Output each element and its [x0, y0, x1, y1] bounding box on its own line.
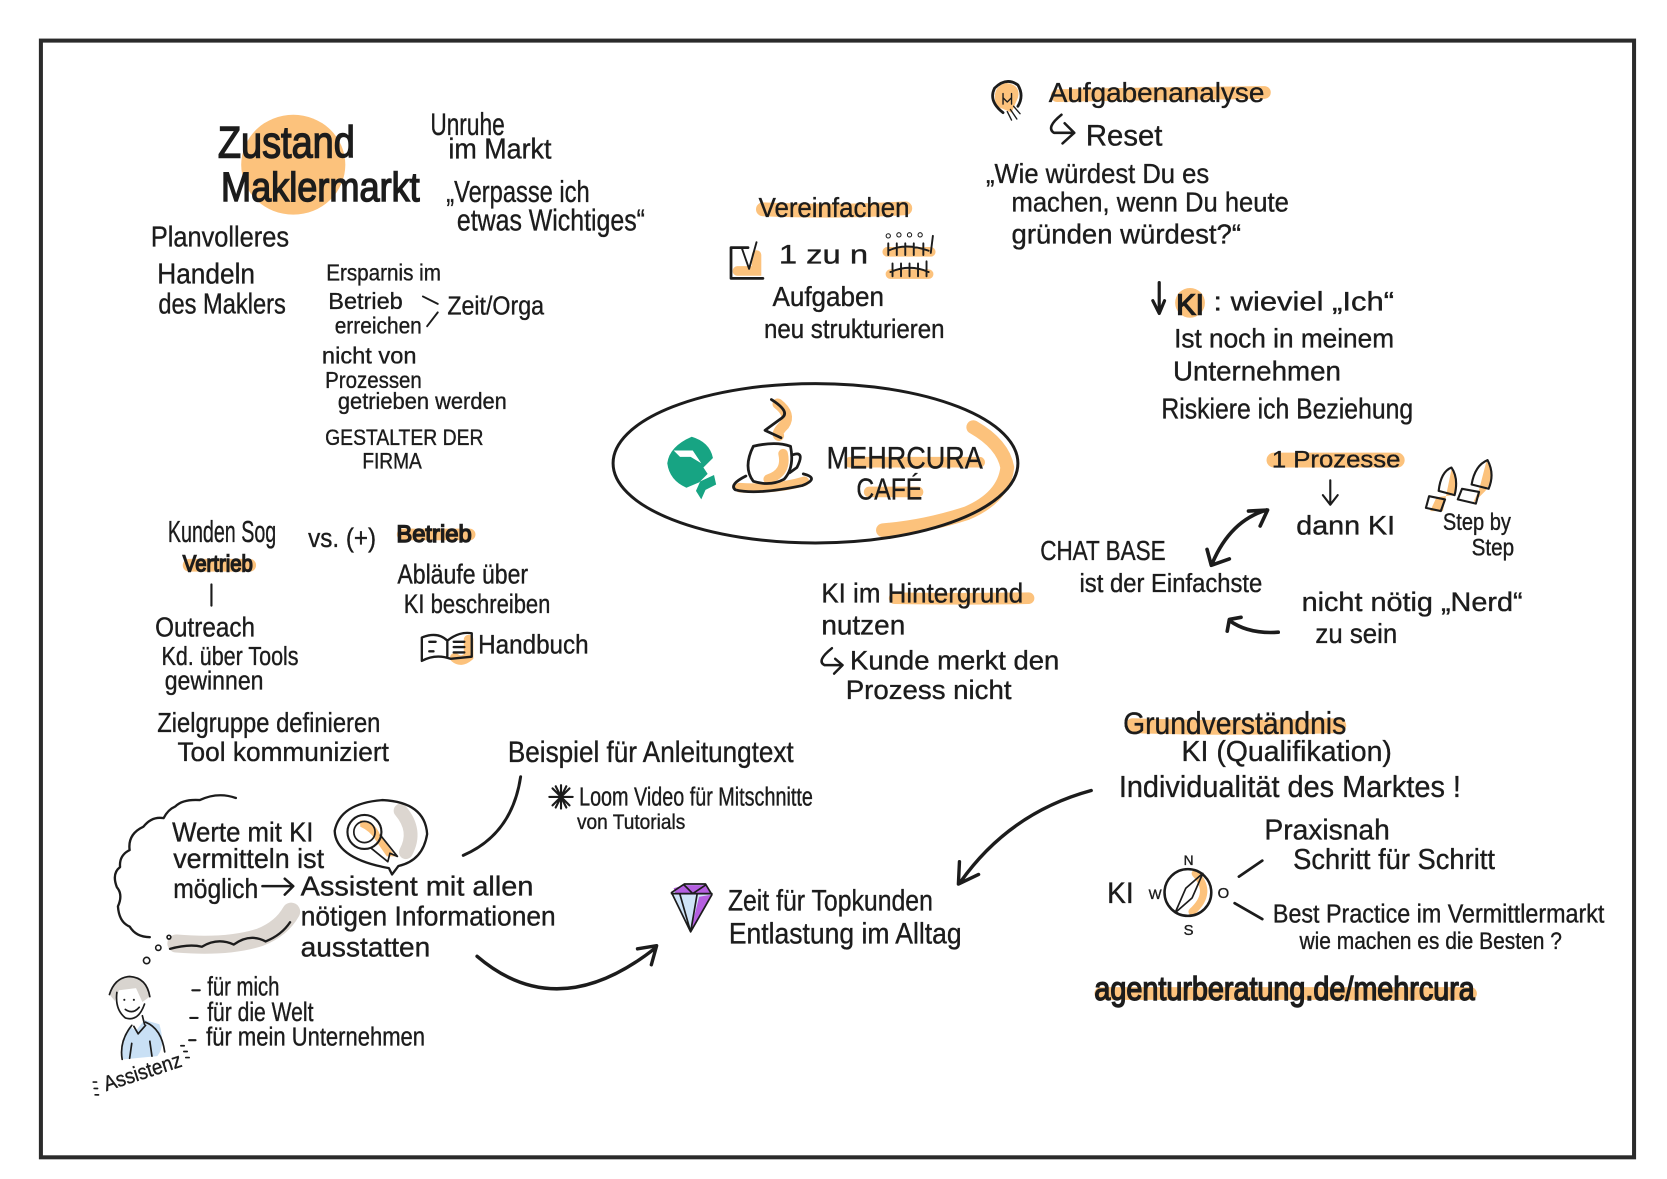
text: Best Practice: Best Practice im Vermittlermarkt [1273, 900, 1604, 928]
text: Gestalter der Firma [325, 425, 483, 474]
icon: compass [1149, 852, 1229, 939]
section: KI wieviel Ich: : wieviel „Ich“ [1213, 286, 1394, 316]
section: Aufgabenanalyse: „Wie würdest Du es [986, 158, 1209, 189]
text: Planvolleres Handeln des Maklers [151, 222, 289, 320]
section: Kunden Sog Vertrieb: Outreach [155, 611, 255, 642]
section: 1 Prozesse dann KI [1272, 447, 1400, 540]
quote: Verpasse ich etwas Wichtiges [446, 174, 645, 238]
text: Zeit für Topkunden [728, 885, 962, 951]
heading: Zustand Maklermarkt [218, 115, 420, 215]
section: Betrieb: Handbuch [478, 629, 589, 659]
text: Zeit für Topkunden: Zeit für Topkunden [728, 885, 933, 918]
section: Kunden Sog Vertrieb: Zielgruppe definieren [157, 707, 380, 738]
section: KI im Hintergrund: KI im Hintergrund [821, 577, 1023, 608]
icon: diamond [672, 884, 712, 932]
section: Betrieb: Abläufe über [397, 558, 528, 589]
icon: star [549, 785, 573, 809]
quote: Verpasse ich etwas Wichtiges: „Verpasse ich [446, 174, 590, 209]
lines: compass connectors [1235, 861, 1262, 919]
section: Vereinfachen [731, 192, 945, 344]
text: Zeit für Topkunden: Entlastung im Alltag [729, 918, 962, 951]
icon: person [109, 976, 165, 1059]
section: Grundverständnis [1119, 705, 1461, 804]
section: KI wieviel Ich: Unternehmen [1173, 355, 1341, 386]
list: für mich, die Welt, mein Unternehmen [189, 972, 425, 1052]
text: Unruhe im Markt [430, 106, 551, 165]
text: Chat Base [1040, 535, 1262, 598]
text: Planvolleres Handeln des Maklers: des Maklers [158, 288, 286, 320]
text: Assistent mit allen Informationen ausstatten: ausstatten [301, 931, 430, 962]
text: Planvolleres Handeln des Maklers: Handeln [157, 259, 255, 291]
text: nicht von Prozessen getrieben werden: nicht von [322, 342, 417, 368]
label: Assistenz: Assistenz [100, 1048, 185, 1096]
icon: compass: W [1149, 886, 1162, 902]
text: Ersparnis im Betrieb erreichen, Zeit/Orga: Zeit/Orga [447, 293, 545, 321]
title: Mehrcura Café [827, 440, 983, 506]
text: Praxisnah [1264, 814, 1495, 876]
section: Vereinfachen: neu strukturieren [764, 314, 945, 344]
text: Assistent mit allen Informationen ausstatten: nötigen Informationen [301, 900, 556, 931]
section: Aufgabenanalyse: Reset [1086, 120, 1163, 153]
section: KI wieviel Ich: Ist noch in meinem [1174, 323, 1394, 353]
section: Kunden Sog Vertrieb: Kd. über Tools [162, 643, 299, 671]
text: Gestalter der Firma: FIRMA [362, 449, 422, 474]
arrow: down [1323, 480, 1338, 505]
section: Kunden Sog Vertrieb: Kunden Sog [168, 514, 276, 549]
section: Aufgabenanalyse: gründen würdest?“ [1012, 218, 1241, 249]
text: Loom Video [549, 783, 813, 834]
thought cloud: Werte mit KI [172, 817, 313, 848]
text: nicht nötig Nerd: nicht nötig „Nerd“ [1302, 587, 1523, 617]
icon: green logo [667, 437, 716, 499]
list: für mich, die Welt, mein Unternehmen: für die Welt [207, 997, 314, 1027]
section: Aufgabenanalyse: machen, wenn Du heute [1012, 186, 1289, 217]
text: Praxisnah: Praxisnah [1264, 814, 1390, 846]
text: Best Practice [1273, 900, 1604, 955]
section: KI wieviel Ich: Riskiere ich Beziehung [1161, 394, 1413, 426]
text: Ersparnis im Betrieb erreichen, Zeit/Orga: Betrieb [328, 288, 403, 314]
text: Ersparnis im Betrieb erreichen, Zeit/Orga: erreichen [335, 313, 422, 339]
section: Betrieb: KI beschreiben [404, 589, 550, 619]
text: Best Practice: wie machen es die Besten ? [1299, 928, 1562, 955]
thought cloud: vermitteln ist [173, 843, 324, 874]
section: Grundverständnis: Grundverständnis [1123, 705, 1346, 741]
arrow: hook [822, 648, 843, 674]
icon: people [886, 233, 933, 276]
section: KI im Hintergrund: nutzen [821, 609, 905, 640]
section: Grundverständnis: KI (Qualifikation) [1182, 736, 1392, 768]
icon: book [422, 633, 472, 661]
text: Assistent mit allen Informationen ausstatten [301, 871, 556, 962]
icon: light bulb [993, 81, 1021, 120]
arrow: back [1227, 617, 1278, 632]
arrow: to diamond [477, 946, 657, 989]
text: Loom Video: von Tutorials [577, 810, 685, 834]
text: Step by Step [1443, 509, 1514, 562]
text: Praxisnah: Schritt für Schritt [1293, 844, 1495, 876]
arrow: double headed [1207, 510, 1268, 565]
icon: compass: N [1184, 852, 1194, 868]
text: Beispiel für Anleitungtext: Beispiel für Anleitungtext [508, 736, 794, 769]
section: Kunden Sog Vertrieb: Vertrieb [183, 551, 253, 577]
section: KI wieviel Ich [1153, 283, 1413, 426]
section: Aufgabenanalyse [986, 77, 1289, 249]
section: KI im Hintergrund [821, 577, 1059, 705]
text: nicht von Prozessen getrieben werden [322, 342, 507, 414]
icon: compass: O [1218, 886, 1229, 902]
text: Planvolleres Handeln des Maklers: Planvolleres [151, 222, 289, 254]
text: Gestalter der Firma: GESTALTER DER [325, 425, 483, 450]
text: nicht nötig Nerd: zu sein [1315, 618, 1397, 649]
section: Aufgabenanalyse: Aufgabenanalyse [1049, 77, 1264, 108]
section: 1 Prozesse dann KI: dann KI [1296, 510, 1395, 540]
line: arc to thought cloud [463, 777, 521, 855]
section: Betrieb: Betrieb [396, 521, 472, 548]
list: für mich, die Welt, mein Unternehmen: für mich [207, 972, 279, 1002]
text: nicht von Prozessen getrieben werden: getrieben werden [338, 388, 507, 414]
section: Vereinfachen: Aufgaben [772, 281, 884, 312]
section: Betrieb [396, 521, 589, 661]
icon: award badge [335, 800, 427, 874]
section: Vereinfachen: Vereinfachen [759, 192, 910, 223]
heading: Zustand Maklermarkt: Maklermarkt [221, 164, 420, 210]
quote: Verpasse ich etwas Wichtiges: etwas Wichtiges“ [457, 203, 645, 238]
icon: coffee cup [734, 400, 812, 492]
section: 1 Prozesse dann KI: 1 Prozesse [1272, 447, 1400, 474]
text: nicht nötig Nerd [1302, 587, 1523, 649]
text: Unruhe im Markt: im Markt [448, 133, 551, 165]
arrow: to Zeit für Topkunden [958, 791, 1091, 884]
text: vs. (+): vs. (+) [308, 523, 376, 553]
thought cloud: möglich [173, 873, 258, 904]
arrow: reset [1051, 115, 1074, 143]
text: Loom Video: Loom Video für Mitschnitte [579, 783, 813, 811]
text: Chat Base: CHAT BASE [1040, 535, 1166, 566]
section: Grundverständnis: Individualität des Marktes ! [1119, 769, 1461, 804]
thought cloud [115, 795, 324, 964]
list: für mich, die Welt, mein Unternehmen: für mein Unternehmen [206, 1024, 425, 1052]
arrow: down [1153, 283, 1165, 313]
text: Unruhe im Markt: Unruhe [430, 106, 505, 142]
section: KI wieviel Ich: KI [1176, 290, 1204, 322]
heading: Zustand Maklermarkt: Zustand [218, 118, 355, 167]
text: Ersparnis im Betrieb erreichen, Zeit/Orga [326, 260, 545, 339]
icon: compass: S [1184, 923, 1194, 939]
text: Step by Step: Step [1472, 535, 1514, 562]
section: Kunden Sog Vertrieb: gewinnen [165, 668, 264, 696]
text: Assistent mit allen Informationen ausstatten: Assistent mit allen [301, 871, 533, 902]
text: Ersparnis im Betrieb erreichen, Zeit/Orga: Ersparnis im [326, 260, 441, 286]
text: Step by Step: Step by [1443, 509, 1512, 536]
section: Kunden Sog Vertrieb [155, 514, 389, 767]
center: Mehrcura Café ellipse [613, 384, 1018, 543]
title: Mehrcura Café: CAFÉ [856, 471, 922, 506]
section: KI im Hintergrund: Prozess nicht [846, 675, 1012, 705]
icon: steps [1426, 460, 1492, 511]
text: nicht von Prozessen getrieben werden: Prozessen [325, 367, 422, 393]
section: Vereinfachen: 1 zu n [779, 240, 868, 270]
section: Kunden Sog Vertrieb: Tool kommuniziert [177, 737, 389, 767]
title: Mehrcura Café: MEHRCURA [827, 440, 983, 476]
text: Chat Base: ist der Einfachste [1080, 570, 1262, 598]
icon: checkbox [731, 242, 763, 278]
url: agenturberatung.de/mehrcura: agenturberatung.de/mehrcura [1094, 970, 1475, 1007]
text: KI: KI [1107, 877, 1134, 910]
section: KI im Hintergrund: Kunde merkt den [850, 645, 1059, 675]
